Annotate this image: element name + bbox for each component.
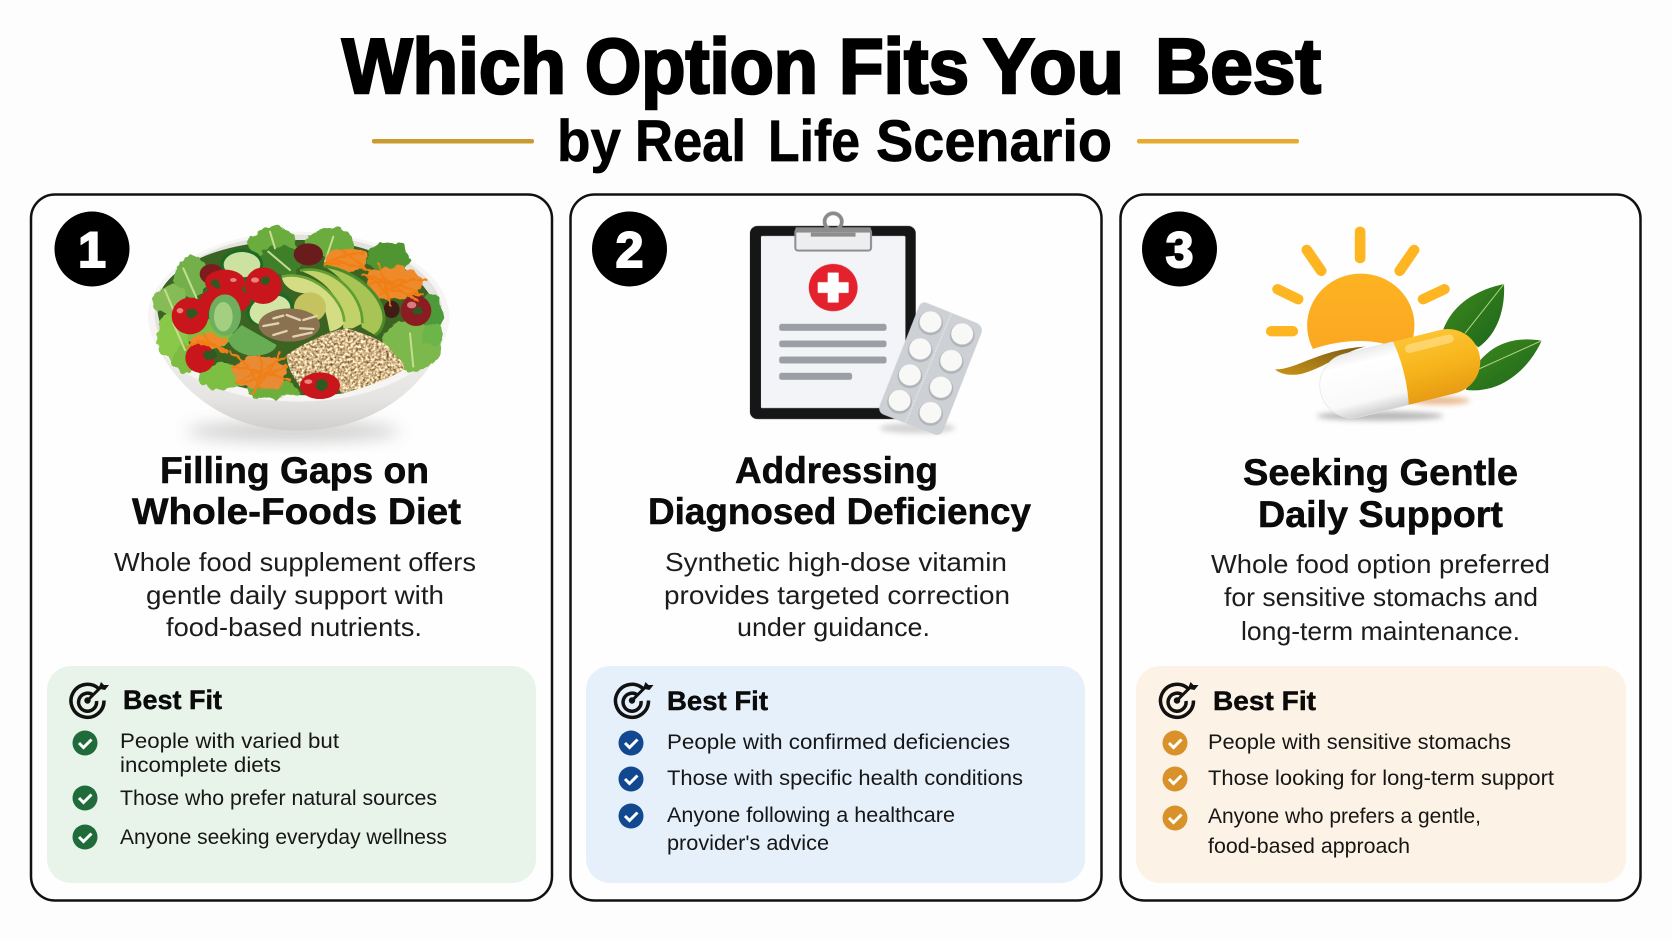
description 1: Whole food supplement offers [114,547,476,577]
rice [287,328,404,393]
lettuce [154,227,444,399]
check item 3.2: Those looking for long-term support [1208,766,1554,790]
check item 1.1: incomplete diets [120,753,281,777]
number badge 1: 1 [78,222,106,278]
heading 1: Filling Gaps on [160,450,429,491]
check item 3.3: Anyone who prefers a gentle, [1208,804,1481,828]
title: You [983,22,1124,110]
carrot bases [190,249,422,390]
cucumbers [220,249,263,279]
check item 1.1: People with varied but [120,729,339,753]
title: Best [1155,22,1321,110]
best fit label 2: Best Fit [667,686,768,716]
description 3 [1211,549,1550,646]
best fit box 3 [1136,666,1626,883]
check item 1.1 [72,729,339,777]
panel: scenario 1 [31,194,552,900]
check item 2.1: People with confirmed deficiencies [667,730,1010,754]
carrots [187,250,425,393]
check item 3.3 [1162,804,1481,858]
number badge 1 [54,212,130,286]
check item 2.3: Anyone following a healthcare [667,803,955,827]
illustration: clipboard and blister pack [750,213,982,435]
cucumber wedge and green pieces [209,294,241,336]
check item 3.3: food-based approach [1208,834,1410,858]
heading 3 [1243,452,1518,535]
card outline 1 [31,194,552,900]
panel: scenario 2 [570,194,1102,900]
subtitle with gold rules: Life [768,109,860,174]
check item 2.2: Those with specific health conditions [667,766,1023,790]
card outline 2 [570,194,1102,900]
title: Which [342,22,566,110]
illustration: capsule and leaves [1275,284,1542,425]
description 1: gentle daily support with [146,580,444,610]
subtitle with gold rules: Real [635,109,746,174]
subtitle with gold rules: by [557,109,621,174]
subtitle with gold rules [372,109,1299,174]
heading 1: Whole-Foods Diet [132,491,461,532]
card outline 3 [1120,194,1640,900]
number badge 3 [1142,212,1217,286]
seeds [259,308,320,342]
number badge 2 [592,212,667,286]
check item 3.1: People with sensitive stomachs [1208,730,1511,754]
heading 2 [648,450,1031,532]
description 3: Whole food option preferred [1211,549,1550,579]
description 2: provides targeted correction [664,580,1010,610]
description 3: long-term maintenance. [1241,616,1520,646]
best fit label 3: Best Fit [1213,686,1316,716]
target icon 1 [71,682,109,717]
number badge 2: 2 [616,222,643,278]
target icon 2 [616,682,654,717]
heading 1 [132,450,461,532]
description 1 [114,547,476,642]
number badge 3: 3 [1166,222,1193,278]
heading 2: Addressing [735,450,938,491]
description 2: Synthetic high-dose vitamin [665,547,1007,577]
description 1: food-based nutrients. [166,612,422,642]
tomatoes [172,267,340,399]
heading 3: Daily Support [1258,494,1503,535]
front tomato [300,372,340,399]
subtitle with gold rules: Scenario [876,109,1112,174]
description 3: for sensitive stomachs and [1224,582,1538,612]
check item 1.2: Those who prefer natural sources [120,786,437,810]
check item 2.3 [618,803,955,855]
check item 2.3: provider's advice [667,831,829,855]
best fit box 1 [47,666,536,883]
heading 2: Diagnosed Deficiency [648,491,1031,532]
best fit box 2 [586,666,1085,883]
title: Option [585,22,818,110]
avocado [282,266,384,335]
illustration: sun rays and sun [1271,232,1444,377]
description 2: under guidance. [737,612,930,642]
dried tomato / onion [294,243,323,265]
description 2 [664,547,1010,642]
check item 1.3: Anyone seeking everyday wellness [120,825,447,849]
best fit label 1: Best Fit [123,685,222,715]
heading 3: Seeking Gentle [1243,452,1518,493]
panel: scenario 3 [1120,194,1640,900]
title [342,22,1321,110]
illustration: salad bowl [148,227,449,441]
title: Fits [839,22,969,110]
target icon 3 [1161,682,1198,717]
